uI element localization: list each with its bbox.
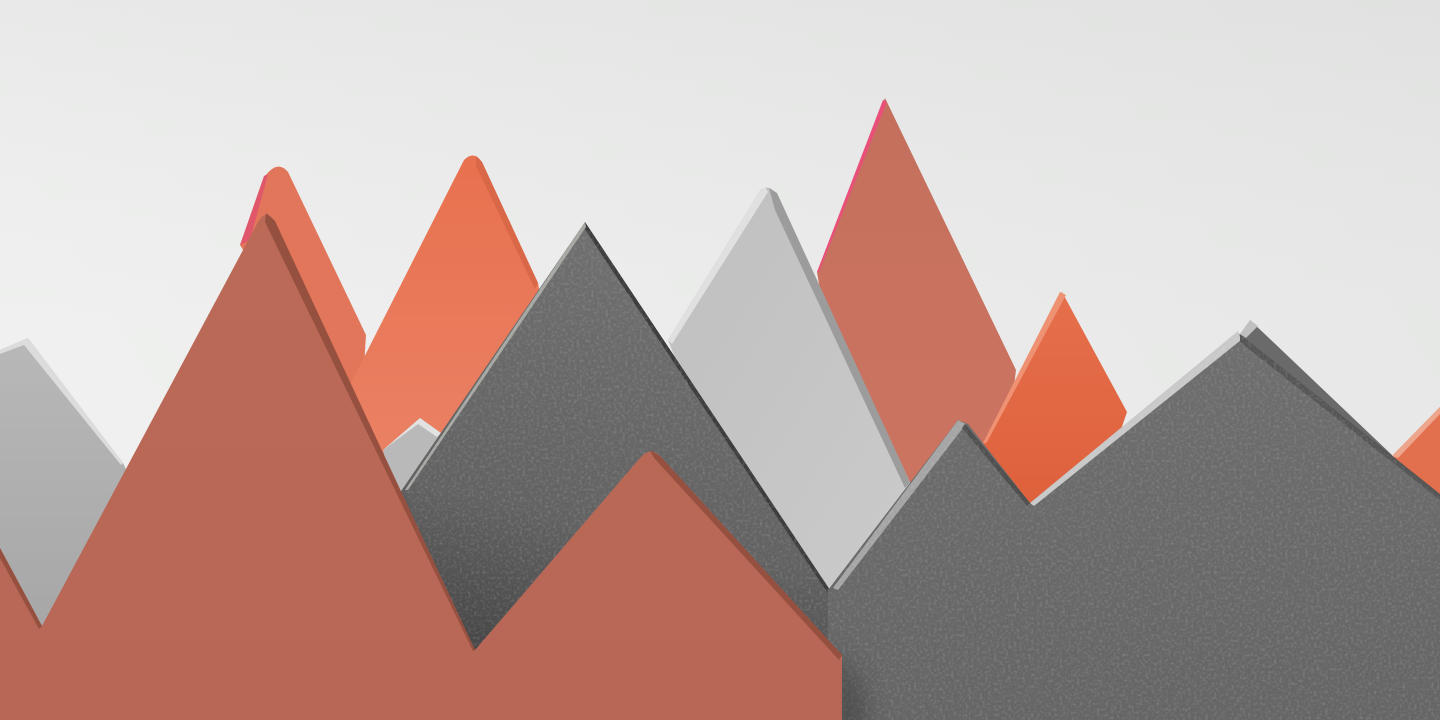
peak: far-right orange sliver — [1392, 407, 1440, 520]
peak: front coral mountain range — [0, 213, 842, 720]
peak: orange right — [982, 292, 1127, 530]
peak: light gray centre — [668, 187, 925, 600]
shadow: soft shade cast by front coral on dark paper — [830, 650, 870, 720]
peak: orange centre-left — [350, 155, 560, 520]
peak: back coral behind front peak — [240, 167, 366, 400]
peak: small light gray fold — [383, 418, 441, 520]
peak: far-left light gray — [0, 338, 150, 640]
peak: tall coral with pink edge — [817, 98, 1016, 500]
peak: dark gray centre — [395, 222, 840, 720]
peak: dark gray right mountain range — [828, 331, 1440, 720]
texture: paper grain on dark peaks — [400, 220, 1440, 720]
peak: dark gray back ridge right — [1230, 320, 1400, 500]
